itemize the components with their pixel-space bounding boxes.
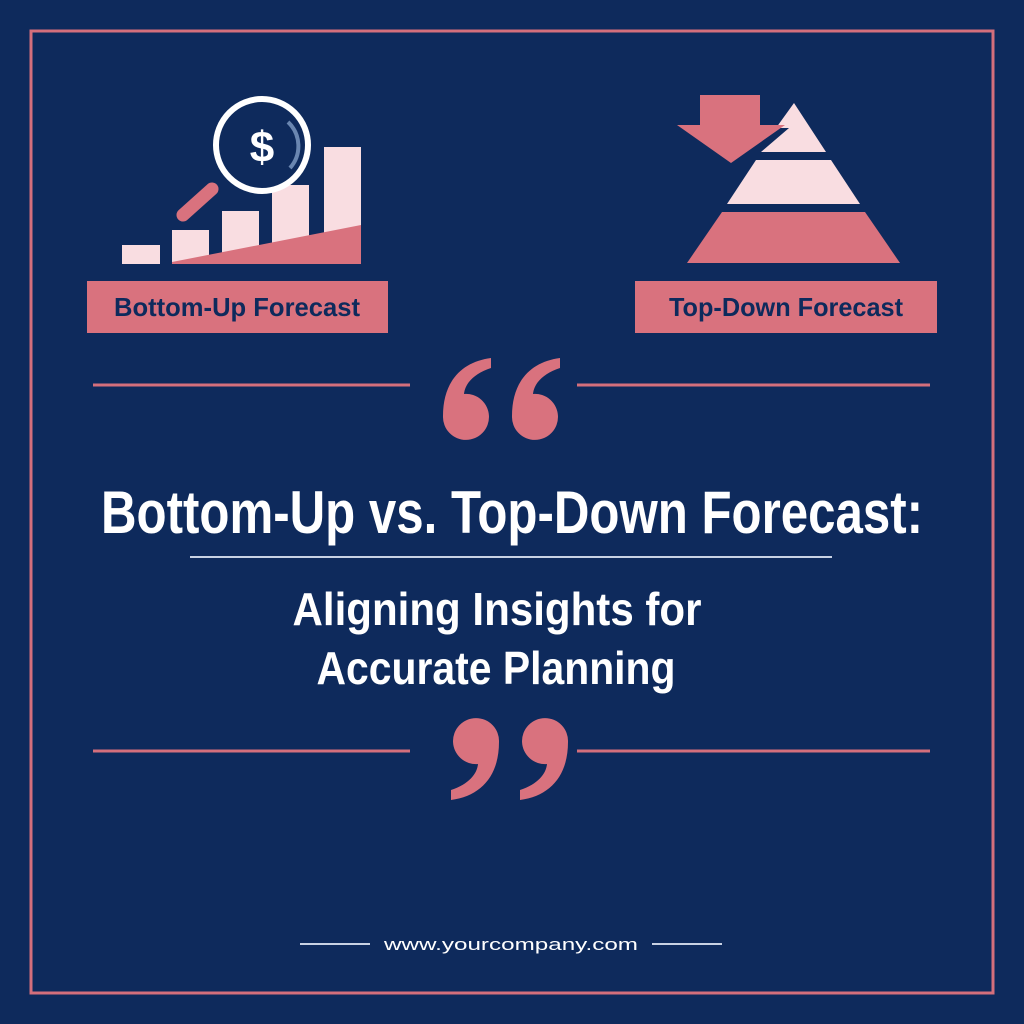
footer: www.yourcompany.com [383, 935, 638, 954]
opening quote [93, 358, 930, 440]
divider [190, 556, 832, 558]
icon: pyramid with down arrow [677, 95, 900, 263]
subtitle: Accurate Planning [316, 642, 676, 694]
label: top-down forecast [635, 281, 937, 333]
icon: bar chart with magnifier: $ [250, 123, 274, 172]
label: top-down forecast: Top-Down Forecast [669, 292, 903, 322]
subtitle: Aligning Insights for [292, 583, 702, 635]
subtitle [292, 583, 702, 694]
closing quote [93, 718, 930, 800]
label: bottom-up forecast: Bottom-Up Forecast [114, 292, 360, 322]
label: bottom-up forecast [87, 281, 388, 333]
icon: bar chart with magnifier [122, 99, 361, 264]
